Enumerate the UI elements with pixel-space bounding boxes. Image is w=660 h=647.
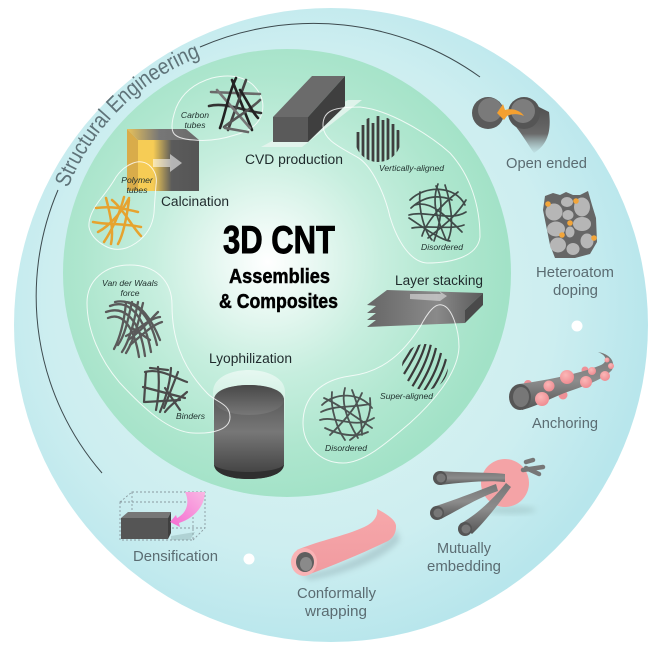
panel: polymer tubes [89,162,156,249]
label: Mutually embedding: Mutually [437,541,492,557]
label: Disordered: Disordered [421,242,463,252]
decorative dot: right [572,320,582,332]
icon: CVD production block [261,76,362,147]
icon: doped carbon lattice [543,191,597,258]
title: 3D CNT Assemblies & Composites: 3D CNT [223,219,335,262]
icon: disordered tubes [320,388,374,440]
label: Conformally wrapping [297,586,377,620]
curved text path [68,56,202,188]
item: densification [120,492,218,565]
label: Super-aligned: Super-aligned [380,391,433,401]
item: anchoring [509,352,614,432]
label: Heteroatom doping: doping [553,283,598,299]
icon: tubes embedded in a particle [430,459,543,536]
label: CVD production: CVD production [245,152,343,167]
label: Anchoring: Anchoring [532,416,598,432]
decorative dot: bottom [244,554,254,564]
label: Conformally wrapping: Conformally [297,586,377,602]
item: heteroatom doping [536,191,614,299]
label: Van der Waals force: Van der Waals [102,278,158,288]
label: Carbon tubes: tubes [184,120,206,130]
icon: lyophilization cylinder [213,370,285,479]
label: Binders: Binders [176,411,206,421]
icon: densified block [120,492,205,540]
label: Lyophilization: Lyophilization [209,351,292,366]
title: 3D CNT Assemblies & Composites: & Composites [219,290,338,313]
label: Heteroatom doping: Heteroatom [536,265,614,281]
icon: tubes joined by binders [143,367,187,412]
label: Polymer tubes: Polymer [121,175,153,185]
arc line surrounding the inner circle [36,23,480,473]
label: Disordered: Disordered [325,443,367,453]
item: conformally wrapping [291,509,400,620]
label: Polymer tubes: tubes [126,185,148,195]
heading: Structural Engineering: Structural Engineering [56,46,200,186]
label: Densification: Densification [133,549,218,565]
icon: vertically-aligned tubes [358,116,398,164]
label: Layer stacking: Layer stacking [395,273,483,288]
label: Carbon tubes: Carbon [181,110,209,120]
item: open ended [472,97,587,172]
title: 3D CNT Assemblies & Composites [219,219,338,313]
inner green circle: assembly methods [63,49,511,497]
icon: layer stacking sheets [367,290,483,327]
icon: bundled tubes by van der Waals force [106,301,162,357]
title: 3D CNT Assemblies & Composites: Assemblies [229,265,330,288]
icon: disordered tubes [409,184,466,241]
item: mutually embedding [427,459,543,575]
panel: carbon tubes [172,76,263,140]
label: Van der Waals force: force [120,288,140,298]
label: Vertically-aligned: Vertically-aligned [379,163,444,173]
panel: lyophilization outcomes [87,265,230,433]
icon: open ended tube [472,97,550,153]
icon: calcination block [127,129,199,191]
label: Heteroatom doping [536,265,614,299]
label: Mutually embedding: embedding [427,559,501,575]
panel: stacking outcomes [303,305,459,463]
panel: CVD outcomes [323,107,480,263]
icon: super-aligned tubes [402,344,448,390]
label: Mutually embedding [427,541,501,575]
label: Open ended: Open ended [506,156,587,172]
label: Calcination: Calcination [161,194,229,209]
icon: wrapped tube [291,509,400,580]
icon: tube with anchored particles [509,352,614,410]
label: Conformally wrapping: wrapping [304,604,367,620]
